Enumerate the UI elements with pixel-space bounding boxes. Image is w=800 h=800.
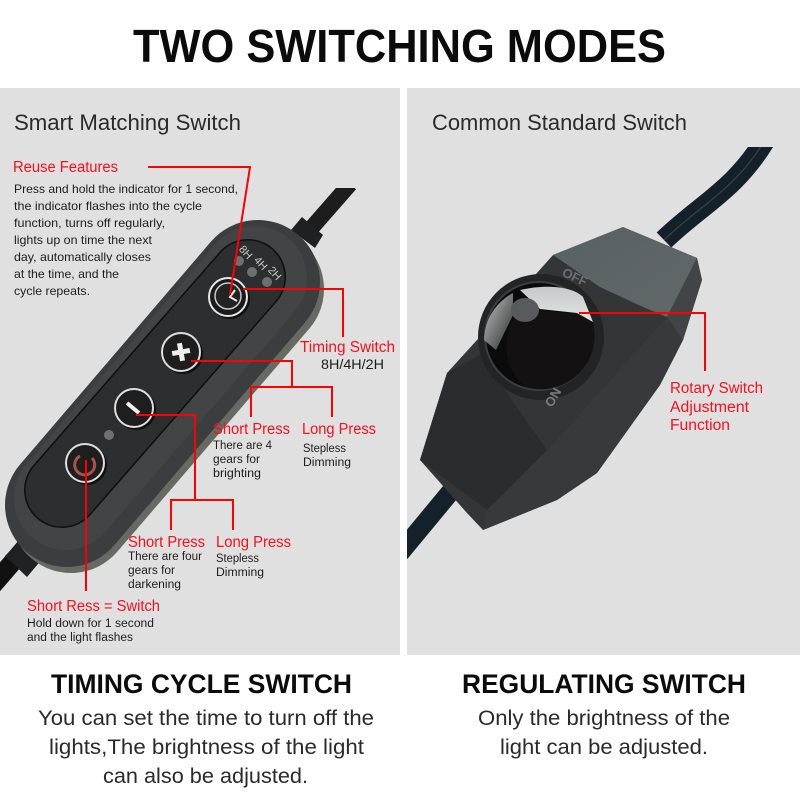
text block: timing cycle switch: TIMING CYCLE SWITCH [51,669,352,699]
callout: timing switch: 8H/4H/2H [321,356,384,372]
leds and timer labels [104,243,283,440]
leds and timer labels: 8H [236,243,254,262]
callout: plus button: There are 4 [213,440,273,452]
callout: plus button: Long Press [302,421,376,438]
text block: timing cycle switch [38,669,374,788]
text block: regulating switch [462,669,746,759]
callout: reuse features: Reuse Features [13,159,118,176]
text block: regulating switch: REGULATING SWITCH [462,669,746,699]
callout: reuse features: cycle repeats. [14,284,90,298]
photo: rotary dimmer [400,140,765,553]
text block: timing cycle switch: can also be adjusted. [103,765,308,788]
callout: minus button: Long Press [216,534,291,551]
callout: rotary switch: Function [670,417,730,434]
leds and timer labels: 4H [251,254,269,273]
panel: smart matching switch [0,88,400,655]
callout: rotary switch: Adjustment [670,399,750,416]
callout: power button [27,460,160,644]
button: power [66,444,107,485]
callout: power button: Short Ress = Switch [27,598,160,615]
callout: minus button [128,415,291,591]
callout: plus button: brighting [213,468,261,480]
callout: minus button: There are four [128,551,202,563]
callout: minus button: Dimming [216,567,264,579]
button: timer [209,278,250,319]
callout: plus button: Stepless [303,443,346,455]
photo: timing controller [0,184,350,586]
callout: plus button: gears for [213,454,260,466]
callout: reuse features: Press and hold the indicator for 1 second, [14,182,238,196]
callout: reuse features: the indicator flashes into the cycle [14,199,202,213]
photo: rotary dimmer: ON [542,385,564,410]
title: TWO SWITCHING MODES [133,20,666,72]
text block: regulating switch: light can be adjusted. [500,736,708,759]
button: minus [115,389,156,430]
text block: timing cycle switch: You can set the time to turn off the [38,707,374,730]
callout: minus button: Short Press [128,534,205,551]
callout: plus button: Dimming [303,457,351,469]
callout: timing switch: Timing Switch [300,339,395,356]
leds and timer labels: 2H [265,264,283,283]
heading: smart matching switch: Smart Matching Switch [14,110,241,135]
button: plus [162,333,203,374]
photo: rotary dimmer: OFF [560,265,590,289]
text block: timing cycle switch: lights,The brightness of the light [49,736,364,759]
text block: regulating switch: Only the brightness of the [478,707,730,730]
callout: reuse features [13,159,250,298]
panel: common standard switch [400,88,800,655]
callout: plus button [191,361,376,480]
callout: minus button: gears for [128,565,175,577]
heading: common standard switch: Common Standard Switch [432,110,687,135]
callout: rotary switch: Rotary Switch [670,380,763,397]
callout: power button: Hold down for 1 second [27,618,154,630]
callout: plus button: Short Press [213,421,290,438]
callout: reuse features: lights up on time the next [14,233,153,247]
callout: timing switch [243,289,395,372]
callout: reuse features: function, turns off regularly, [14,216,165,230]
callout: power button: and the light flashes [27,632,133,644]
callout: reuse features: at the time, and the [14,267,119,281]
callout: reuse features: day, automatically closes [14,250,151,264]
callout: rotary switch [579,313,763,434]
callout: minus button: Stepless [216,553,259,565]
callout: minus button: darkening [128,579,181,591]
